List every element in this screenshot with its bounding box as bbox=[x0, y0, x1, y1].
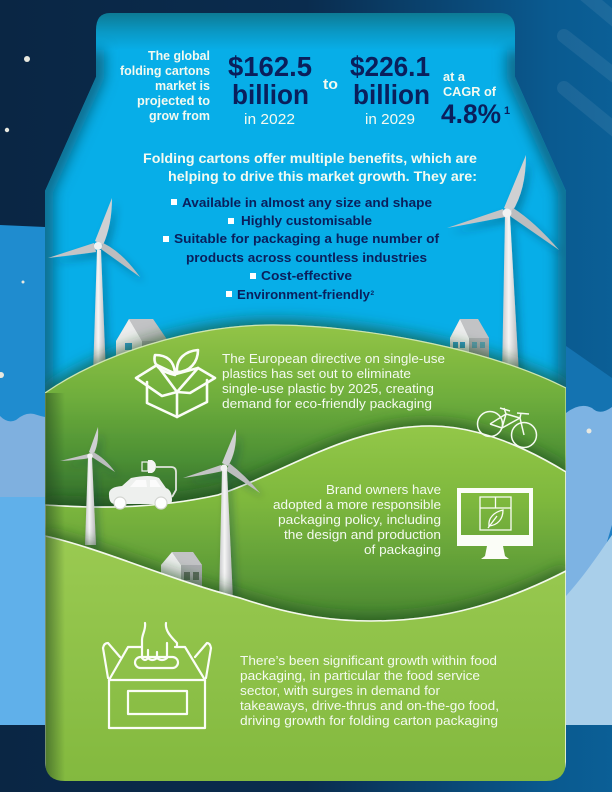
clouds right bbox=[566, 346, 612, 725]
text: food packaging: takeaways, drive-thrus and on-the-go food, bbox=[240, 699, 499, 713]
intro text bbox=[120, 48, 210, 123]
house lower bbox=[161, 552, 202, 586]
value 2029 bbox=[350, 51, 430, 128]
text: brand owners: of packaging bbox=[364, 543, 441, 557]
value 2022: in 2022 bbox=[244, 111, 295, 128]
hill 3 bbox=[45, 536, 566, 790]
left edge shade bbox=[45, 393, 65, 783]
text: food packaging: packaging, in particular the food service bbox=[240, 669, 480, 683]
intro text: The global bbox=[148, 48, 210, 63]
hill 2 bbox=[45, 426, 566, 640]
sky panel bbox=[45, 13, 566, 392]
benefits heading bbox=[143, 151, 478, 184]
wind turbine left bbox=[48, 198, 140, 375]
icon: food carton with hand bbox=[103, 623, 211, 728]
intro text: projected to bbox=[137, 93, 210, 108]
text: European directive: The European directive on single-use bbox=[222, 352, 445, 366]
text: brand owners bbox=[273, 483, 441, 557]
value 2022: billion bbox=[232, 79, 309, 110]
market growth stats bbox=[120, 48, 510, 129]
benefits list: 2 bbox=[370, 290, 374, 297]
value 2022 bbox=[228, 51, 312, 128]
house left bbox=[116, 319, 166, 356]
text: food packaging: sector, with surges in demand for bbox=[240, 684, 440, 698]
text: brand owners: packaging policy, including bbox=[278, 513, 441, 527]
wind turbine middle left bbox=[60, 427, 115, 545]
icon: box with leaves bbox=[136, 350, 215, 417]
text: European directive bbox=[222, 352, 445, 411]
text: brand owners: adopted a more responsible bbox=[273, 498, 441, 512]
to: to bbox=[323, 77, 338, 93]
CAGR: 4.8% bbox=[441, 99, 501, 129]
CAGR bbox=[441, 69, 510, 129]
text: brand owners: the design and production bbox=[284, 528, 441, 542]
intro text: folding cartons bbox=[120, 63, 210, 78]
bicycle icon bbox=[478, 408, 536, 448]
icon: monitor with carton bbox=[457, 488, 533, 559]
text: European directive: demand for eco-friendly packaging bbox=[222, 397, 432, 411]
value 2029: in 2029 bbox=[365, 111, 415, 128]
benefits list: Suitable for packaging a huge number of bbox=[174, 231, 440, 246]
benefits list: Highly customisable bbox=[241, 213, 372, 228]
stars bbox=[0, 56, 592, 434]
CAGR: CAGR of bbox=[443, 84, 497, 99]
hill 1 bbox=[45, 309, 566, 506]
CAGR: 1 bbox=[504, 105, 510, 117]
benefits heading: Folding cartons offer multiple benefits, which are bbox=[143, 151, 478, 166]
value 2029: $226.1 bbox=[350, 51, 430, 82]
value 2022: $162.5 bbox=[228, 51, 312, 82]
benefits list bbox=[163, 195, 440, 302]
clouds left bbox=[0, 225, 45, 725]
intro text: market is bbox=[155, 78, 210, 93]
benefits list: Available in almost any size and shape bbox=[182, 195, 432, 210]
text: European directive: single-use plastic by 2025, creating bbox=[222, 382, 434, 396]
house right bbox=[450, 319, 489, 358]
text: food packaging: There’s been significant growth within food bbox=[240, 654, 497, 668]
CAGR: at a bbox=[443, 69, 466, 84]
text: food packaging: driving growth for folding carton packaging bbox=[240, 714, 498, 728]
wind turbine right bbox=[447, 155, 559, 375]
electric car icon bbox=[109, 460, 176, 509]
text: European directive: plastics has set out to eliminate bbox=[222, 367, 411, 381]
wind turbine middle right bbox=[183, 429, 260, 600]
benefits list: products across countless industries bbox=[186, 250, 427, 265]
text: food packaging bbox=[240, 654, 499, 728]
benefits list: Environment-friendly bbox=[237, 287, 371, 302]
text: brand owners: Brand owners have bbox=[326, 483, 441, 497]
benefits heading: helping to drive this market growth. They are: bbox=[168, 169, 477, 184]
value 2029: billion bbox=[353, 79, 430, 110]
benefits list: Cost-effective bbox=[261, 268, 352, 283]
intro text: grow from bbox=[149, 108, 210, 123]
